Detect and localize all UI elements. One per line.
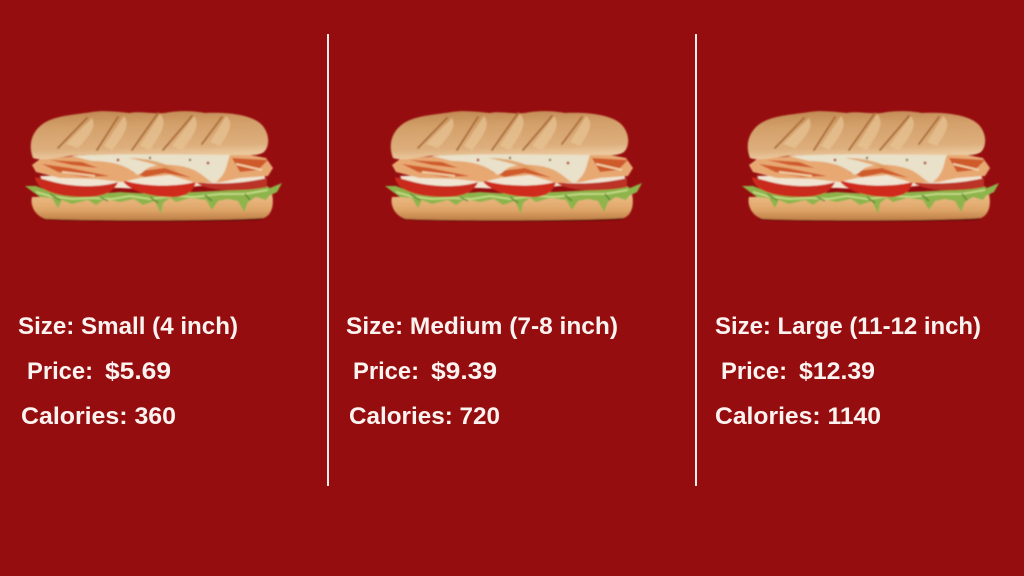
large size label: Size: Large (11-12 inch): [715, 313, 981, 340]
panel: small sandwich: [18, 111, 282, 430]
small price: Price:: [27, 358, 93, 385]
divider: right: [695, 34, 697, 486]
medium calories: Calories: 720: [349, 403, 500, 430]
icon: medium sandwich image: [385, 111, 642, 222]
small calories: Calories: 360: [21, 403, 176, 430]
panel: large sandwich: [715, 111, 999, 430]
medium size label: Size: Medium (7-8 inch): [346, 313, 618, 340]
small size label: Size: Small (4 inch): [18, 313, 238, 340]
small price: $5.69: [105, 358, 171, 385]
medium price: Price:: [353, 358, 419, 385]
large price: Price:: [721, 358, 787, 385]
panel: medium sandwich: [346, 111, 642, 430]
medium price: $9.39: [431, 358, 497, 385]
large calories: Calories: 1140: [715, 403, 881, 430]
divider: left: [327, 34, 329, 486]
icon: small sandwich image: [25, 111, 282, 222]
large price: $12.39: [799, 358, 875, 385]
icon: large sandwich image: [742, 111, 999, 222]
